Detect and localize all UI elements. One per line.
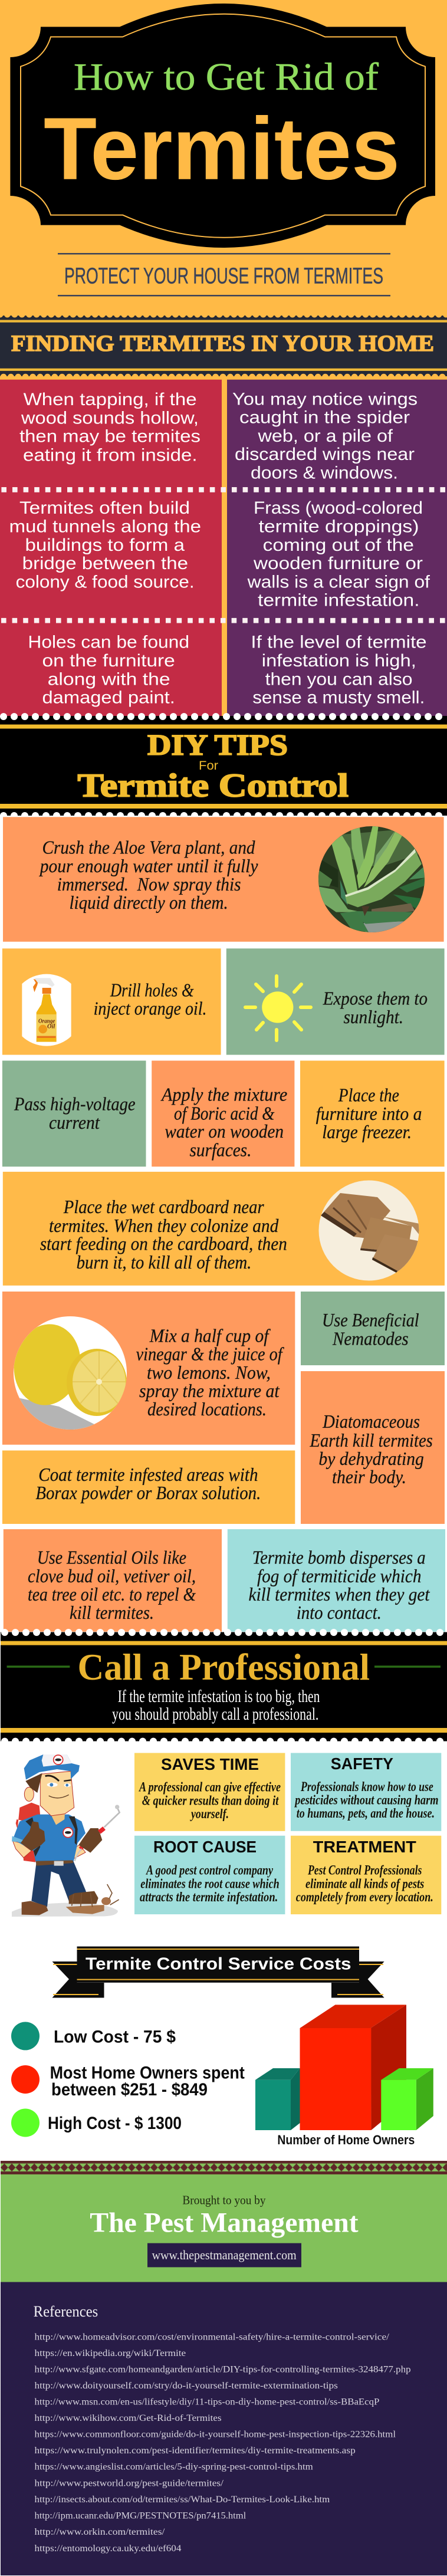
benefit card: root cause [134, 1836, 285, 1914]
section banner: call a professional [1, 1632, 447, 1742]
tip text: vinegar and lemon: spray the mixture at [139, 1380, 280, 1401]
benefit card: saves time: SAVES TIME [161, 1755, 259, 1773]
reference list: https://www.trulynolen.com/pest-identifier/termites/diy-termite-treatments.asp [34, 2446, 356, 2456]
tip panel: borax: Borax powder or Borax solution. [35, 1482, 261, 1503]
tip panel: aloe vera [3, 817, 444, 942]
tip text: vinegar and lemon: vinegar & the juice of [136, 1343, 284, 1364]
tip panel: freezer [300, 1060, 445, 1167]
tip panel: freezer: Place the [338, 1084, 399, 1105]
reference list: https://www.angieslist.com/articles/5-diy-spring-pest-control-tips.htm [34, 2462, 313, 2472]
section banner: finding termites: FINDING TERMITES IN YOUR HOME [11, 331, 434, 356]
tip panel: boric acid: of Boric acid & [174, 1102, 275, 1123]
tip panel: freezer: furniture into a [316, 1103, 422, 1124]
image: orange oil bottle: Orange [38, 1018, 55, 1024]
benefit card: safety: SAFETY [331, 1754, 393, 1773]
sign: holes: damaged paint. [42, 688, 175, 708]
header panel [0, 0, 447, 316]
benefit card: root cause: ROOT CAUSE [153, 1838, 257, 1856]
image: orange oil bottle: Oil [47, 1023, 55, 1030]
tip text: wet cardboard: burn it, to kill all of them. [77, 1251, 251, 1273]
illustration: pest control man [12, 1754, 120, 1917]
tip panel: essential oils: Use Essential Oils like [37, 1546, 186, 1568]
tip panel: boric acid: water on wooden [165, 1121, 284, 1142]
tip panel: nematodes: Nematodes [332, 1328, 409, 1349]
tip panel: essential oils: tea tree oil etc. to repel & [28, 1583, 196, 1605]
bar chart: number of home owners [255, 2005, 433, 2147]
tip panel: essential oils: clove bud oil, vetiver oil, [28, 1565, 196, 1586]
tip text: orange oil: inject orange oil. [94, 998, 206, 1019]
ribbon heading: termite control service costs [52, 1946, 384, 1998]
tip panel: boric acid: surfaces. [190, 1139, 251, 1160]
reference list: https://www.commonfloor.com/guide/do-it-yourself-home-pest-inspection-tips-22326.html [34, 2430, 396, 2439]
tip panel: diatomaceous earth: by dehydrating [318, 1448, 424, 1469]
sign: hollow wood: wood sounds hollow, [21, 408, 199, 428]
sign: musty smell: then you can also [265, 669, 413, 689]
tip panel: essential oils [4, 1529, 222, 1632]
tip panel: diatomaceous earth: Diatomaceous [322, 1411, 420, 1432]
tip panel: termite bomb: Termite bomb disperses a [252, 1546, 426, 1568]
legend item: high cost [11, 2109, 182, 2137]
legend item: low cost: Low Cost - 75 $ [54, 2027, 176, 2046]
benefit card: root cause: eliminates the root cause which [140, 1877, 280, 1891]
references panel: References [34, 2303, 98, 2320]
reference list: http://www.msn.com/en-us/lifestyle/diy/11-tips-on-diy-home-pest-control/ss-BBaEcqP [34, 2397, 379, 2407]
tip panel: vinegar and lemon [2, 1292, 295, 1445]
section banner: call a professional: If the termite infestation is too big, then [118, 1687, 320, 1706]
sign: frass: walls is a clear sign of [247, 572, 430, 592]
tip panel: termite bomb: kill termites when they get [249, 1583, 430, 1605]
tip text: aloe vera: Crush the Aloe Vera plant, and [42, 836, 255, 857]
tip panel: boric acid: Apply the mixture [160, 1084, 287, 1105]
panel: signs of termites [0, 380, 447, 716]
sign: hollow wood: eating it from inside. [23, 445, 197, 465]
sign: holes: along with the [48, 669, 170, 689]
tip panel: termite bomb: fog of termiticide which [257, 1565, 421, 1586]
legend item: most home owners: between $251 - $849 [51, 2080, 208, 2099]
tip panel: essential oils: kill termites. [70, 1602, 154, 1623]
title word: termites: Termites [44, 99, 400, 198]
footer panel: the pest management: The Pest Management [90, 2207, 359, 2238]
reference list: http://www.wikihow.com/Get-Rid-of-Termites [34, 2413, 222, 2423]
section banner: DIY tips [0, 716, 447, 816]
tip text: wet cardboard: Place the wet cardboard near [63, 1196, 264, 1217]
tip panel: termite bomb [228, 1529, 445, 1632]
tip text: aloe vera: liquid directly on them. [70, 892, 228, 913]
benefit card: saves time: yourself. [190, 1806, 229, 1821]
tip text: sunlight: Expose them to [323, 988, 428, 1009]
tip panel: nematodes: Use Beneficial [322, 1309, 419, 1330]
image: orange oil bottle [22, 974, 71, 1046]
section banner: DIY tips: DIY TIPS [147, 728, 288, 761]
reference list: http://www.sfgate.com/homeandgarden/article/DIY-tips-for-controlling-termites-3248477.php [34, 2364, 411, 2374]
tip panel: nematodes [301, 1292, 445, 1365]
legend item: most home owners [11, 2064, 245, 2099]
reference list: https://entomology.ca.uky.edu/ef604 [34, 2544, 182, 2554]
sign: musty smell: infestation is high, [262, 651, 416, 671]
sign: mud tunnels: Termites often build [19, 498, 190, 518]
tip text: vinegar and lemon: two lemons. Now, [147, 1362, 271, 1383]
tip panel: orange oil [2, 948, 221, 1055]
legend item: most home owners: Most Home Owners spent [50, 2064, 245, 2083]
tip panel: high voltage: Pass high-voltage [14, 1093, 136, 1115]
tip panel: high voltage [2, 1060, 146, 1167]
sign: mud tunnels: buildings to form a [25, 535, 185, 555]
tip text: aloe vera: pour enough water until it fully [39, 855, 258, 876]
image: aloe vera plant [318, 826, 425, 932]
tip panel: boric acid [152, 1060, 294, 1167]
tip panel: termite bomb: into contact. [297, 1602, 382, 1623]
tip panel: wet cardboard [3, 1172, 445, 1286]
footer panel: the pest management: Brought to you by [182, 2193, 266, 2207]
benefit card: root cause: A good pest control company [145, 1863, 274, 1878]
image: cardboard pieces [318, 1179, 420, 1281]
image: lemons [14, 1316, 127, 1430]
sign: wings: discarded wings near [235, 445, 415, 464]
benefit card: treatment: TREATMENT [313, 1838, 416, 1856]
footer panel: the pest management [1, 2161, 447, 2282]
reference list: http://www.homeadvisor.com/cost/environmental-safety/hire-a-termite-control-service/ [34, 2332, 390, 2342]
sign: wings: web, or a pile of [257, 426, 393, 446]
reference list: http://www.pestworld.org/pest-guide/termites/ [34, 2479, 224, 2489]
reference list: http://www.orkin.com/termites/ [34, 2527, 165, 2537]
sign: frass: termite droppings) [258, 517, 419, 537]
sign: mud tunnels: mud tunnels along the [9, 517, 201, 537]
tip panel: freezer: large freezer. [322, 1121, 412, 1142]
sign: hollow wood: then may be termites [19, 427, 201, 446]
sign: frass: Frass (wood-colored [254, 498, 423, 518]
sign: frass: wooden furniture or [253, 554, 423, 573]
tip text: wet cardboard: start feeding on the cardboard, then [40, 1233, 287, 1254]
reference list: https://en.wikipedia.org/wiki/Termite [34, 2348, 186, 2358]
benefit card: saves time: & quicker results than doing it [142, 1793, 279, 1808]
sign: wings: You may notice wings [232, 389, 418, 409]
sign: wings: doors & windows. [251, 463, 398, 482]
title line: how to get rid of: How to Get Rid of [74, 55, 379, 98]
sign: wings: caught in the spider [239, 408, 410, 427]
benefit card: safety [291, 1753, 441, 1831]
legend: costs [11, 2022, 245, 2137]
tip text: sunlight: sunlight. [343, 1006, 403, 1027]
sign: musty smell: sense a musty smell. [252, 688, 425, 708]
benefit card: treatment [291, 1836, 441, 1914]
section banner: call a professional: Call a Professional [78, 1646, 370, 1688]
tip text: orange oil: Drill holes & [110, 979, 194, 1000]
sign: holes: on the furniture [42, 651, 175, 671]
benefit card: saves time [134, 1753, 285, 1831]
website url box [147, 2243, 301, 2267]
section banner: DIY tips: Termite Control [78, 768, 349, 804]
tip text: aloe vera: immersed. Now spray this [57, 873, 241, 895]
title plaque [10, 4, 435, 248]
reference list: http://www.doityourself.com/stry/do-it-yourself-termite-extermination-tips [34, 2381, 338, 2391]
sign: holes: Holes can be found [28, 632, 189, 652]
tip panel: diatomaceous earth [301, 1371, 445, 1524]
icon: sun [245, 976, 311, 1040]
sign: hollow wood: When tapping, if the [24, 390, 197, 409]
section banner: DIY tips: For [199, 759, 218, 773]
tip panel: borax: Coat termite infested areas with [38, 1464, 258, 1485]
benefit card: saves time: A professional can give effective [138, 1780, 281, 1795]
ribbon heading: termite control service costs: Termite Control Service Costs [86, 1954, 351, 1973]
tip text: wet cardboard: termites. When they colonize and [49, 1215, 279, 1236]
tip text: vinegar and lemon: desired locations. [147, 1398, 267, 1420]
benefit card: root cause: attracts the termite infestation. [140, 1890, 278, 1904]
sign: musty smell: If the level of termite [251, 632, 427, 652]
reference list: http://insects.about.com/od/termites/ss/What-Do-Termites-Look-Like.htm [34, 2495, 330, 2505]
sign: frass: termite infestation. [258, 591, 420, 610]
website url box: www.thepestmanagement.com [152, 2248, 297, 2262]
chart axis label: Number of Home Owners [277, 2133, 415, 2147]
section banner: call a professional: you should probably call a professional. [112, 1704, 318, 1724]
sign: mud tunnels: bridge between the [22, 554, 188, 573]
tip panel: diatomaceous earth: their body. [332, 1466, 406, 1487]
tip panel: sunlight [226, 948, 445, 1055]
legend item: high cost: High Cost - $ 1300 [48, 2114, 182, 2133]
sign: mud tunnels: colony & food source. [16, 572, 195, 592]
tip panel: high voltage: current [49, 1112, 100, 1133]
sign: frass: coming out of the [263, 535, 414, 555]
legend item: low cost [11, 2022, 176, 2050]
tip panel: borax [2, 1451, 295, 1524]
tip text: vinegar and lemon: Mix a half cup of [149, 1325, 271, 1346]
tip panel: diatomaceous earth: Earth kill termites [310, 1430, 433, 1451]
section banner: finding termites [0, 314, 447, 380]
references panel [1, 2282, 447, 2575]
reference list: http://ipm.ucanr.edu/PMG/PESTNOTES/pn7415.html [34, 2511, 246, 2521]
